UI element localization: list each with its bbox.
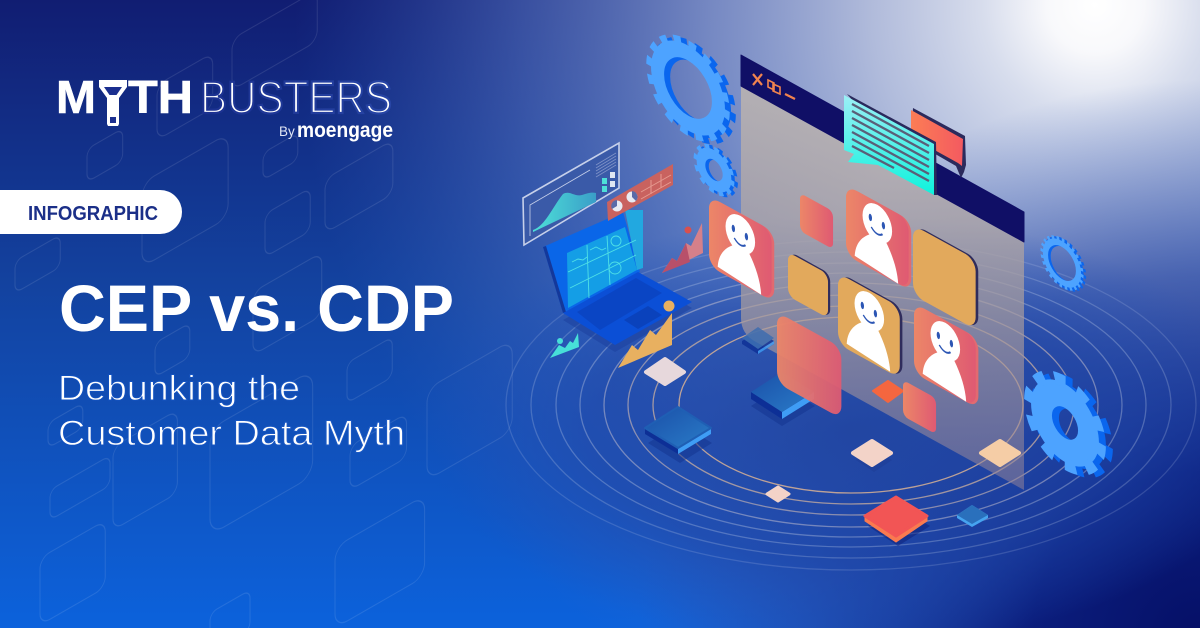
platform: small cream diamond <box>767 487 789 501</box>
icon: flashlight <box>99 80 127 126</box>
speech bubble: red <box>911 108 966 178</box>
gear large bottom right <box>1029 360 1108 488</box>
byline: moengage <box>297 119 393 142</box>
pill label <box>0 190 182 234</box>
laptop keyboard base <box>563 272 692 345</box>
subtitle: Debunking the <box>58 369 300 408</box>
red mountain chart <box>662 223 703 273</box>
pill label: INFOGRAPHIC <box>28 203 158 225</box>
logo letters TH: TH <box>128 71 193 123</box>
logo letters BUSTERS: BUSTERS <box>200 72 392 123</box>
tile: person red bottom <box>914 303 978 409</box>
teal small mountain chart <box>550 333 579 358</box>
laptop lid <box>543 212 640 313</box>
logo: Mythbusters <box>56 71 392 126</box>
tile: large translucent red <box>777 312 841 419</box>
tile: person red left <box>709 196 774 302</box>
main title: CEP vs. CDP <box>59 271 454 345</box>
tile: person red top <box>846 185 911 291</box>
gear right small <box>1042 228 1085 299</box>
flat red tile <box>873 381 903 402</box>
platform: red diamond <box>865 497 930 546</box>
platform: large blue <box>645 407 712 463</box>
laptop <box>543 210 692 352</box>
byline: By <box>279 124 295 139</box>
platform: blue under large red tile <box>751 372 815 426</box>
speech bubble: cyan <box>844 94 937 195</box>
red pie chart card <box>607 164 673 221</box>
faint background tile outlines <box>15 0 512 628</box>
platform: peach diamond right <box>981 441 1019 465</box>
subtitle: Customer Data Myth <box>58 414 405 453</box>
dashboard chart panel <box>523 143 619 245</box>
gear large top <box>650 21 732 158</box>
window title bar <box>741 55 1024 242</box>
window translucent body <box>741 84 1024 490</box>
tile: small red bottom <box>903 380 936 434</box>
subtitle <box>58 369 405 453</box>
tile: small red top <box>800 193 833 249</box>
laptop screen <box>567 227 637 308</box>
laptop shadow <box>563 278 692 352</box>
tile: large orange <box>913 224 978 331</box>
tile: small orange <box>788 250 830 319</box>
window controls <box>753 74 795 99</box>
logo letter M: M <box>56 71 96 123</box>
orange mountain chart <box>618 300 674 368</box>
gear middle <box>696 138 736 204</box>
concentric orbit rings <box>506 240 1196 570</box>
platform: small blue diamond <box>957 505 988 527</box>
platform: cream diamond left <box>646 359 684 384</box>
tile: person orange <box>838 272 902 380</box>
platform: small blue under window <box>742 327 774 354</box>
platform: cream diamond centre <box>853 441 892 472</box>
browser window <box>741 55 1024 490</box>
